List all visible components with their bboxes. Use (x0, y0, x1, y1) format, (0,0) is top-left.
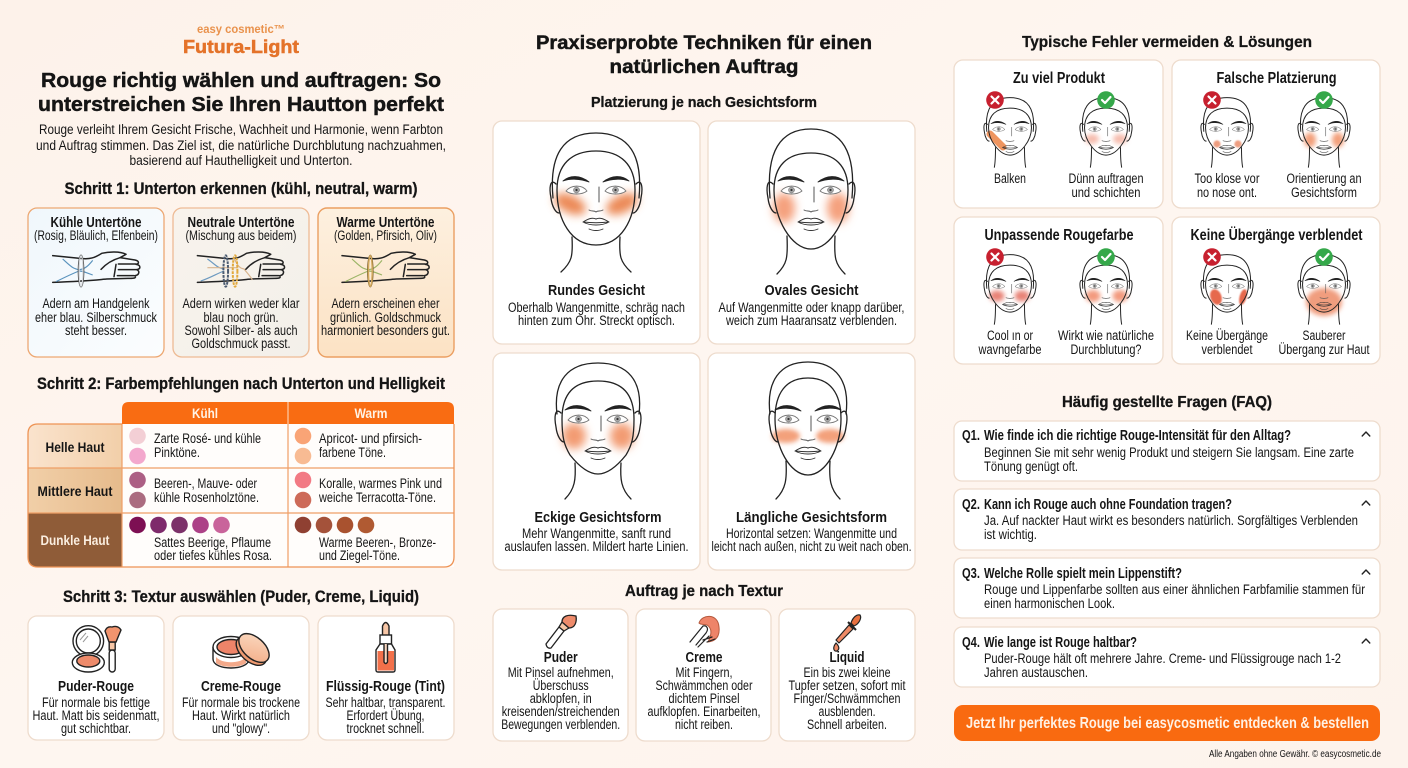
title: Rouge richtig wählen und auftragen: So (41, 69, 441, 92)
panel: too much product (954, 60, 1163, 208)
icon: powder brush (546, 615, 576, 648)
icon: compact and brush (72, 626, 121, 672)
round face text: hinten zum Ohr. Streckt optisch. (518, 313, 675, 328)
cell: dark cool: Sattes Beerige, Pflaume (154, 535, 271, 550)
FAQ item 1: Wie finde ich die richtige Rouge-Intensität für den Alltag? (984, 428, 1291, 444)
logo (183, 24, 299, 57)
intro text: basierend auf Hauthelligkeit und Unterton. (130, 153, 352, 168)
panel: oval face (708, 121, 915, 344)
panel: round face (493, 121, 700, 344)
row label: dark skin: Dunkle Haut (40, 532, 110, 548)
long face text (712, 510, 912, 554)
FAQ item 2 (954, 489, 1380, 550)
FAQ item 3 (954, 558, 1380, 618)
correct example: Orientierung an (1286, 171, 1362, 186)
liquid application text: Ein bis zwei kleine (804, 665, 890, 680)
illustration: long face (769, 362, 847, 499)
correct example (1058, 248, 1154, 357)
FAQ item 4: Q4. (962, 635, 980, 651)
long face text: Horizontal setzen: Wangenmitte und (726, 526, 897, 541)
intro text (36, 122, 446, 168)
heading: FAQ: Häufig gestellte Fragen (FAQ) (1062, 394, 1272, 411)
mistake heading: Keine Übergänge verblendet (1190, 227, 1362, 244)
powder application text: Puder (544, 650, 578, 666)
wrong example: Cool ın or (987, 328, 1033, 343)
cell: medium cool (129, 472, 259, 508)
powder application text (501, 650, 620, 732)
cream text: Haut. Wirkt natürlich (192, 708, 290, 723)
cell: dark cool: oder tiefes kühles Rosa. (154, 548, 272, 563)
liquid application text: Liquid (830, 650, 864, 666)
cell: medium warm: Koralle, warmes Pink und (319, 476, 442, 491)
heading: step 3: Schritt 3: Textur auswählen (Puder, Creme, Liquid) (63, 588, 419, 606)
table header (122, 402, 454, 424)
mistake heading: Unpassende Rougefarbe (984, 227, 1134, 244)
correct example: Übergang zur Haut (1278, 342, 1370, 357)
liquid text: Flüssig-Rouge (Tint) (326, 679, 445, 695)
wrong example: Too klose vor (1194, 171, 1260, 186)
icon: dropper (834, 615, 861, 651)
cream text: und "glowy". (212, 721, 270, 736)
correct example (1278, 248, 1370, 357)
cream application text: nicht reiben. (675, 717, 733, 732)
heading: typical mistakes: Typische Fehler vermeiden & Lösungen (1022, 34, 1312, 51)
wrong example (984, 91, 1036, 186)
heading: step 1: Schritt 1: Unterton erkennen (kühl, neutral, warm) (64, 180, 418, 198)
heading: step 2: Schritt 2: Farbempfehlungen nach Unterton und Helligkeit (37, 375, 445, 393)
long face text: leicht nach außen, nicht zu weit nach oben. (712, 539, 912, 554)
correct example: Durchblutung? (1070, 342, 1142, 357)
liquid text: trocknet schnell. (346, 721, 424, 736)
powder application text: kreisenden/streichenden (502, 704, 620, 719)
warm heading (334, 215, 437, 243)
cream application text: dichtem Pinsel (668, 691, 740, 706)
neutral text: Goldschmuck passt. (192, 336, 290, 351)
powder application text: Bewegungen verblenden. (501, 717, 620, 732)
warm text (321, 296, 450, 338)
powder text: gut schichtbar. (61, 721, 131, 736)
wrong example (1194, 91, 1260, 200)
intro text: und Auftrag stimmen. Das Ziel ist, die natürliche Durchblutung nachzuahmen, (36, 138, 446, 153)
cell: medium cool: kühle Rosenholztöne. (154, 490, 259, 505)
neutral heading: (Mischung aus beidem) (186, 228, 296, 243)
illustration: square face (555, 363, 641, 499)
panel: long face (708, 353, 915, 570)
correct example: und schichten (1072, 185, 1140, 200)
FAQ item 4 (954, 627, 1380, 687)
FAQ item 1: Q1. (962, 428, 980, 444)
cell: dark warm: und Ziegel-Töne. (319, 548, 400, 563)
cell: light warm (295, 428, 422, 464)
logo: Futura-Light (183, 37, 299, 57)
logo: easy cosmetic™ (197, 24, 285, 36)
icon: cream jar with lid (213, 628, 274, 671)
cool heading: (Rosig, Bläulich, Elfenbein) (34, 228, 158, 243)
intro text: Rouge verleiht Ihrem Gesicht Frische, Wachheit und Harmonie, wenn Farbton (39, 122, 443, 137)
square face text: auslaufen lassen. Mildert harte Linien. (504, 539, 688, 554)
square face text (504, 510, 688, 554)
panel: square face (493, 353, 700, 570)
cream application text: Creme (686, 650, 722, 666)
FAQ item 3: Welche Rolle spielt mein Lippenstift? (984, 566, 1182, 582)
panel: neutral undertones (173, 208, 309, 357)
cream application text: Schwämmchen oder (656, 678, 753, 693)
mistake heading: Falsche Platzierung (1216, 70, 1336, 87)
round face text (508, 283, 685, 328)
correct example (1286, 91, 1362, 200)
icon: dropper bottle (376, 622, 395, 672)
neutral text: blau noch grün. (204, 310, 278, 325)
liquid application text: Finger/Schwämmchen (794, 691, 900, 706)
liquid application text: Tupfer setzen, sofort mit (788, 678, 906, 693)
table header: Kühl (192, 405, 218, 421)
warm text: grünlich. Goldschmuck (330, 310, 441, 325)
cream text: Creme-Rouge (201, 679, 281, 695)
heading: application by texture: Auftrag je nach Textur (625, 583, 783, 600)
cream application text: Mit Fingern, (676, 665, 732, 680)
powder text: Haut. Matt bis seidenmatt, (32, 708, 160, 723)
liquid text: Erfordert Übung, (346, 708, 424, 723)
FAQ item 2: ist wichtig. (984, 527, 1037, 542)
mistake heading: Zu viel Produkt (1013, 70, 1105, 87)
warm heading: (Golden, Pfirsich, Oliv) (334, 228, 437, 243)
cream text: Für normale bis trockene (182, 695, 300, 710)
cell: light warm: farbene Töne. (319, 445, 386, 460)
FAQ item 1: Tönung genügt oft. (984, 459, 1078, 474)
FAQ item 3: Q3. (962, 566, 980, 582)
powder text (32, 679, 160, 736)
row label: medium skin (28, 468, 122, 513)
FAQ item 4: Jahren austauschen. (984, 665, 1088, 680)
heading: techniques: Praxiserprobte Techniken für einen (536, 33, 872, 54)
warm text: harmoniert besonders gut. (321, 323, 450, 338)
long face text: Längliche Gesichtsform (736, 510, 887, 526)
square face text: Eckige Gesichtsform (534, 510, 662, 526)
cell: dark warm (295, 517, 436, 563)
cell: light cool (129, 428, 261, 464)
illustration: round face (550, 133, 642, 272)
cool heading (34, 215, 158, 243)
cool text (35, 296, 157, 338)
panel: cream application (636, 609, 771, 741)
powder text: Puder-Rouge (58, 679, 134, 695)
FAQ item 2: Kann ich Rouge auch ohne Foundation tragen? (984, 497, 1232, 513)
wrong example: Keine Übergänge (1186, 328, 1268, 343)
panel: cream rouge (173, 616, 309, 740)
row label: light skin: Helle Haut (46, 439, 105, 455)
warm text: Adern erscheinen eher (332, 296, 440, 311)
liquid application text: Schnell arbeiten. (807, 717, 887, 732)
warm heading: Warme Untertöne (336, 215, 434, 231)
panel: warm undertones (318, 208, 454, 357)
cell: dark cool (129, 517, 272, 563)
powder application text: abklopfen, in (530, 691, 592, 706)
wrong example: wavngefarbe (978, 342, 1042, 357)
cell: medium warm (295, 472, 442, 508)
icon: wrist with gold bangle (342, 252, 429, 287)
liquid text: Sehr haltbar, transparent. (326, 695, 446, 710)
neutral heading: Neutrale Untertöne (188, 215, 294, 231)
title: unterstreichen Sie Ihren Hautton perfekt (38, 93, 444, 116)
icon: fingers with cream (690, 616, 719, 647)
row label: medium skin: Mittlere Haut (38, 483, 113, 499)
icon: wrist with two bangles (197, 252, 285, 287)
panel: powder rouge (28, 616, 164, 740)
neutral text: Adern wirken weder klar (182, 296, 300, 311)
table: colour recommendations (28, 402, 454, 567)
cool text: steht besser. (65, 323, 127, 338)
FAQ item 1 (954, 421, 1380, 481)
neutral heading (186, 215, 296, 243)
cream application text (648, 650, 760, 732)
heading: techniques (536, 33, 872, 78)
wrong example: Balken (994, 171, 1026, 186)
oval face text: Auf Wangenmitte oder knapp darüber, (718, 300, 904, 315)
heading: techniques: natürlichen Auftrag (610, 57, 798, 78)
round face text: Oberhalb Wangenmitte, schräg nach (508, 300, 685, 315)
oval face text: weich zum Haaransatz verblenden. (725, 313, 897, 328)
title (38, 69, 444, 116)
panel: liquid rouge (318, 616, 454, 740)
panel: powder application (493, 609, 628, 741)
wrong example: no nose ont. (1197, 185, 1257, 200)
wrong example (1186, 248, 1268, 357)
panel: cool undertones (28, 208, 164, 357)
square face text: Mehr Wangenmitte, sanft rund (522, 526, 671, 541)
row label: dark skin (28, 513, 122, 567)
cool text: eher blau. Silberschmuck (35, 310, 157, 325)
FAQ item 2: Q2. (962, 497, 980, 513)
powder application text: Mit Pinsel aufnehmen, (508, 665, 614, 680)
FAQ item 4: Puder-Rouge hält oft mehrere Jahre. Creme- und Flüssigrouge nach 1-2 (984, 651, 1341, 666)
call to action button (954, 705, 1380, 741)
neutral text: Sowohl Silber- als auch (184, 323, 298, 338)
wrong example (978, 248, 1042, 357)
neutral text (182, 296, 300, 351)
cell: light warm: Apricot- und pfirsich- (319, 431, 422, 446)
heading: placement: Platzierung je nach Gesichtsform (591, 94, 817, 111)
panel: wrong placement (1172, 60, 1380, 208)
liquid text (326, 679, 446, 736)
panel: wrong colour (954, 217, 1163, 364)
correct example: Dünn auftragen (1068, 171, 1144, 186)
wrong example: verblendet (1202, 342, 1253, 357)
panel: liquid application (779, 609, 915, 741)
correct example: Wirkt wie natürliche (1058, 328, 1154, 343)
cell: light cool: Pinktöne. (154, 445, 200, 460)
illustration: oval face (767, 129, 855, 274)
cell: medium cool: Beeren-, Mauve- oder (154, 476, 257, 491)
liquid application text: ausblenden. (818, 704, 876, 719)
row label: light skin (28, 424, 122, 468)
cell: light cool: Zarte Rosé- und kühle (154, 431, 261, 446)
cell: dark warm: Warme Beeren-, Bronze- (319, 535, 436, 550)
powder application text: Überschuss (533, 678, 589, 693)
icon: wrist with silver bangle (53, 252, 140, 287)
FAQ item 4: Wie lange ist Rouge haltbar? (984, 635, 1137, 651)
cool heading: Kühle Untertöne (50, 215, 142, 231)
cream application text: aufklopfen. Einarbeiten, (648, 704, 760, 719)
correct example: Sauberer (1302, 328, 1346, 343)
table header: Warm (354, 405, 388, 421)
oval face text: Ovales Gesicht (764, 283, 859, 299)
cream text (182, 679, 300, 736)
round face text: Rundes Gesicht (548, 283, 645, 299)
panel: no blending (1172, 217, 1380, 364)
liquid application text (788, 650, 906, 732)
powder text: Für normale bis fettige (42, 695, 150, 710)
cell: medium warm: weiche Terracotta-Töne. (318, 490, 436, 505)
correct example: Gesichtsform (1291, 185, 1357, 200)
correct example (1068, 91, 1144, 200)
oval face text (718, 283, 904, 328)
cool text: Adern am Handgelenk (42, 296, 150, 311)
FAQ item 3: einen harmonischen Look. (984, 596, 1115, 611)
